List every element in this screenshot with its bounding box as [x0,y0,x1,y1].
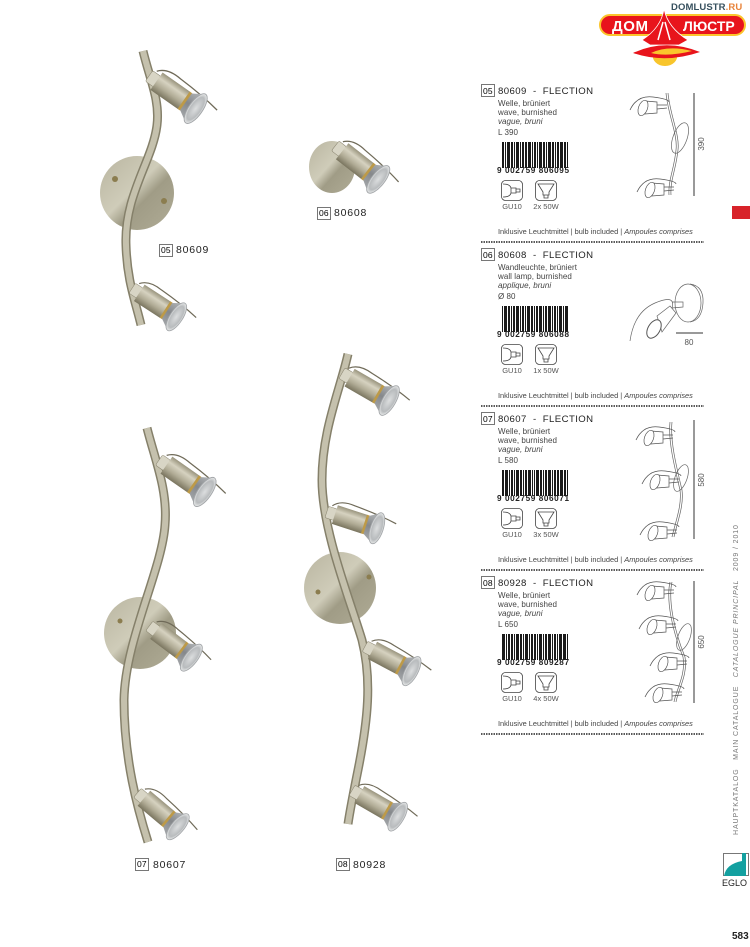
panel: spec 80928: Welle, brüniert [498,591,551,600]
panel: spec 80609: 9 002759 806095 [497,166,569,175]
panel: spec 80609: vague, bruni [498,117,543,126]
panel: spec 80928: vague, bruni [498,609,543,618]
logo: Dom Lustr: ЛЮСТР [683,18,735,34]
panel: spec 80608: 9 002759 806088 [497,330,569,339]
panel: spec 80607: wave, burnished [497,436,557,445]
product label: 06 80608: 80608 [334,207,367,219]
panel: spec 80928: L 650 [498,620,518,629]
panel: spec 80607: 07 [483,414,493,424]
logo: Dom Lustr [600,2,745,66]
product label: 08 80928: 08 [338,859,348,869]
panel: spec 80928: wave, burnished [497,600,557,609]
panel: spec 80609: wave, burnished [497,108,557,117]
panel: spec 80928: 9 002759 809287 [497,658,569,667]
product label: 07 80607: 80607 [153,859,186,871]
panel: spec 80607: vague, bruni [498,445,543,454]
panel: spec 80609: L 390 [498,128,518,137]
panel: spec 80609 [481,84,704,242]
panel: spec 80608: Ø 80 [498,292,516,301]
panel: spec 80608: GU10 [502,366,522,375]
panel: spec 80607: Inklusive Leuchtmittel | bulb included | Ampoules comprises [498,555,693,564]
panel: spec 80608: 80608 - FLECTION [498,250,594,261]
product photo: 80607 [104,428,229,850]
panel: spec 80609: 80609 - FLECTION [498,86,594,97]
panel: spec 80607: 80607 - FLECTION [498,414,594,425]
product label: 05 80609: 05 [161,245,171,255]
product label: 05 80609: 80609 [176,244,209,256]
panel: spec 80609: Inklusive Leuchtmittel | bulb included | Ampoules comprises [498,227,693,236]
drawing: 80928: 650 [697,635,706,649]
panel: spec 80928: 08 [483,578,493,588]
panel: spec 80607: L 580 [498,456,518,465]
drawing: 80607 [636,420,706,542]
panel: spec 80607: 3x 50W [533,530,560,539]
product label: 07 80607: 07 [137,859,147,869]
side title: catalogue: HAUPTKATALOG MAIN CATALOGUE CATALOGUE PRINCIPAL 2009 / 2010 [733,524,740,835]
product label: 08 80928: 80928 [353,859,386,871]
panel: spec 80607 [481,412,704,570]
drawing: 80608: 80 [685,338,694,347]
panel: spec 80928 [481,576,704,734]
product label: 06 80608: 06 [319,208,329,218]
drawing: 80609 [630,93,706,199]
product label: 05 80609 [160,244,209,256]
panel: spec 80607: GU10 [502,530,522,539]
drawing: 80607: 580 [697,473,706,487]
page number: 583 [732,931,749,942]
product label: 06 80608 [318,207,367,220]
panel: spec 80608: applique, bruni [498,281,551,290]
panel: spec 80607: 9 002759 806071 [497,494,569,503]
panel: spec 80928: Inklusive Leuchtmittel | bulb included | Ampoules comprises [498,719,693,728]
product photo: 80609 [100,51,221,340]
drawing: 80609: 390 [697,137,706,151]
panel: spec 80608 [481,248,704,406]
product photo: 80608 [309,133,402,203]
panel: spec 80609: 2x 50W [533,202,560,211]
panel: spec 80609: Welle, brüniert [498,99,551,108]
panel: spec 80608: 1x 50W [533,366,560,375]
logo: Eglo [722,853,748,888]
panel: spec 80608: Wandleuchte, brüniert [498,263,578,272]
panel: spec 80928: GU10 [502,694,522,703]
panel: spec 80609: 05 [483,86,493,96]
logo: Dom Lustr: ДОМ [612,18,649,35]
panel: spec 80608: Inklusive Leuchtmittel | bulb included | Ampoules comprises [498,391,693,400]
panel: spec 80928: 4x 50W [533,694,560,703]
product label: 07 80607 [136,858,186,871]
side tab: red marker [732,206,750,219]
panel: spec 80928: 80928 - FLECTION [498,578,594,589]
panel: spec 80608: wall lamp, burnished [497,272,572,281]
product photo: 80928 [304,354,434,839]
drawing: 80928 [637,581,706,704]
logo: Eglo: EGLO [722,878,747,888]
logo: Dom Lustr: DOMLUSTR.RU [671,2,742,13]
panel: spec 80607: Welle, brüniert [498,427,551,436]
product label: 08 80928 [336,858,386,871]
panel: spec 80609: GU10 [502,202,522,211]
drawing: 80608 [630,284,703,347]
panel: spec 80608: 06 [483,250,493,260]
